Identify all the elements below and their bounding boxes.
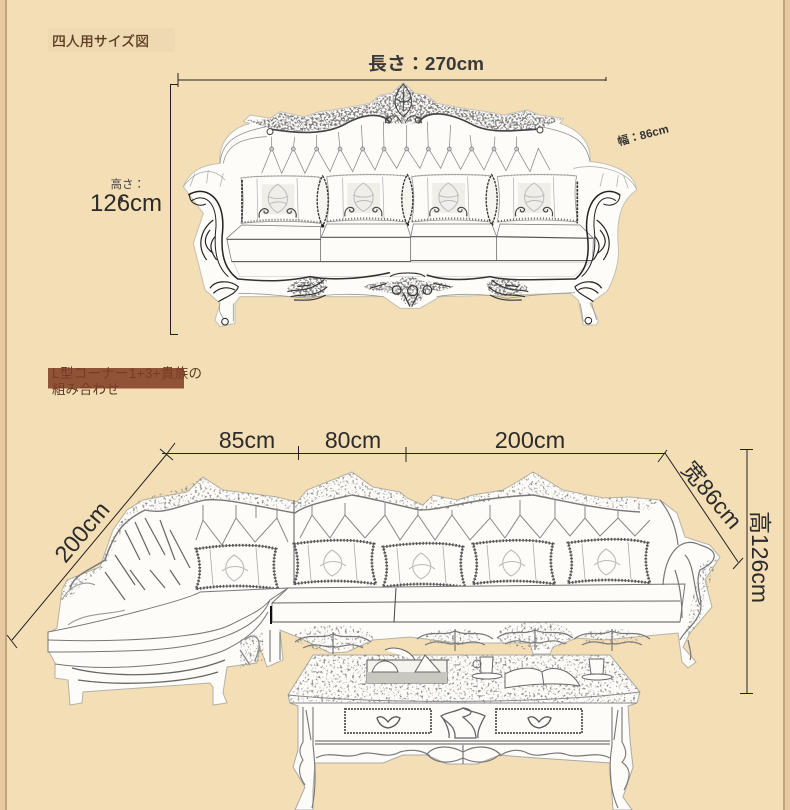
tufted backrest <box>105 500 650 600</box>
open book <box>505 668 580 688</box>
teacup right <box>582 659 612 680</box>
carving texture <box>55 465 725 675</box>
label: 80cm: 80cm <box>325 427 381 453</box>
front rail carvings <box>240 628 650 665</box>
right arm scroll <box>663 542 714 660</box>
carving texture <box>247 84 562 306</box>
label: 200cm diagonal: 200cm <box>49 497 115 567</box>
left arm carving <box>183 170 238 325</box>
section heading: L-shaped corner combination: L型コーナー1+3+貴族の <box>52 366 202 381</box>
teacup left <box>472 657 502 679</box>
label: 200cm width: 200cm <box>495 427 565 453</box>
corner sofa throw pillows <box>196 539 650 589</box>
tufting buttons <box>270 147 519 151</box>
table silhouette <box>288 655 640 810</box>
section heading: L-shaped corner combination: 組み合わせ <box>52 382 120 397</box>
table legs <box>299 707 629 808</box>
seat cushions <box>227 224 593 262</box>
main seat cushions <box>271 584 685 624</box>
left arm detail <box>62 583 125 625</box>
pillow tassel loops <box>242 175 577 228</box>
table edge <box>288 692 640 703</box>
coffee table illustration <box>285 648 645 810</box>
label: height 126cm: 高126cm <box>747 511 773 603</box>
crest carving <box>267 84 543 135</box>
label: width 86cm: 宽86cm <box>677 456 747 534</box>
dimension: depth 86cm: 幅：86cm <box>616 121 670 149</box>
four-seat sofa illustration <box>183 80 637 327</box>
left drawer <box>345 709 431 733</box>
tray with decor <box>367 648 447 683</box>
dimension: height 126cm: 126cm <box>90 190 162 217</box>
apron line and carving <box>315 741 610 764</box>
right drawer <box>496 709 582 733</box>
dimension: length 270cm <box>178 54 606 87</box>
chaise seat <box>48 588 288 683</box>
heading: four-seat size diagram <box>48 28 175 52</box>
lower frame carving <box>238 273 575 307</box>
back frame and tufting <box>220 122 590 173</box>
right edge strip <box>783 0 790 810</box>
section heading: L-shaped corner combination <box>48 366 202 397</box>
heading: four-seat size diagram: 四人用サイズ図 <box>52 34 149 49</box>
dimension: length 270cm: 長さ：270cm <box>368 54 484 74</box>
left edge strip <box>0 0 7 810</box>
dimension lines for corner sofa <box>7 443 753 694</box>
marble texture <box>288 655 640 702</box>
corner sofa silhouette <box>48 472 720 705</box>
center acanthus carving <box>441 708 485 738</box>
sofa silhouette <box>183 83 637 327</box>
dimension: height 126cm: 高さ： <box>110 178 145 191</box>
seat rail <box>233 262 590 277</box>
dimension: height 126cm <box>90 84 178 334</box>
right arm carving <box>573 167 636 324</box>
throw pillows <box>241 175 577 223</box>
crest and top rail carving <box>70 495 678 590</box>
label: 85cm: 85cm <box>219 427 275 453</box>
corner sofa illustration <box>48 465 725 705</box>
